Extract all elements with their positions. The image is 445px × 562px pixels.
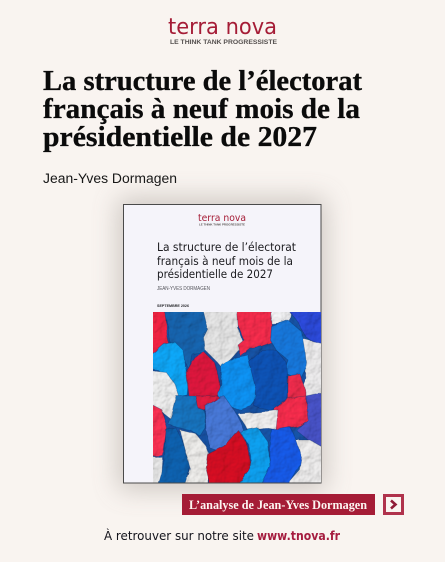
- footer line: www.tnova.fr: [257, 528, 341, 543]
- button: analysis link: [182, 494, 375, 515]
- title: La structure de l’électorat: [43, 66, 363, 97]
- cover title: présidentielle de 2027: [157, 267, 273, 281]
- cover logo: LE THINK TANK PROGRESSISTE: [199, 222, 245, 226]
- logo tagline: LE THINK TANK PROGRESSISTE: [170, 39, 277, 46]
- logo: terra nova: terra nova: [168, 15, 277, 40]
- title: présidentielle de 2027: [43, 122, 317, 153]
- cover title: français à neuf mois de la: [157, 254, 293, 268]
- report cover: [124, 204, 324, 486]
- icon: arrow button: [384, 496, 402, 514]
- cover shadow: [118, 198, 326, 490]
- cover title: La structure de l’électorat: [157, 240, 296, 254]
- footer line: À retrouver sur notre site: [104, 528, 254, 543]
- cover logo: terra nova: [198, 213, 246, 224]
- title: français à neuf mois de la: [43, 94, 360, 125]
- title: [43, 66, 363, 153]
- cover author: JEAN-YVES DORMAGEN: [157, 286, 210, 292]
- cover date: SEPTEMBRE 2026: [157, 304, 189, 308]
- footer line: [104, 528, 341, 543]
- author: Jean-Yves Dormagen: [43, 171, 177, 186]
- cover title: [157, 240, 296, 281]
- cover image: paper head silhouettes: [150, 309, 324, 486]
- button: analysis link: L’analyse de Jean-Yves Dormagen: [189, 497, 368, 512]
